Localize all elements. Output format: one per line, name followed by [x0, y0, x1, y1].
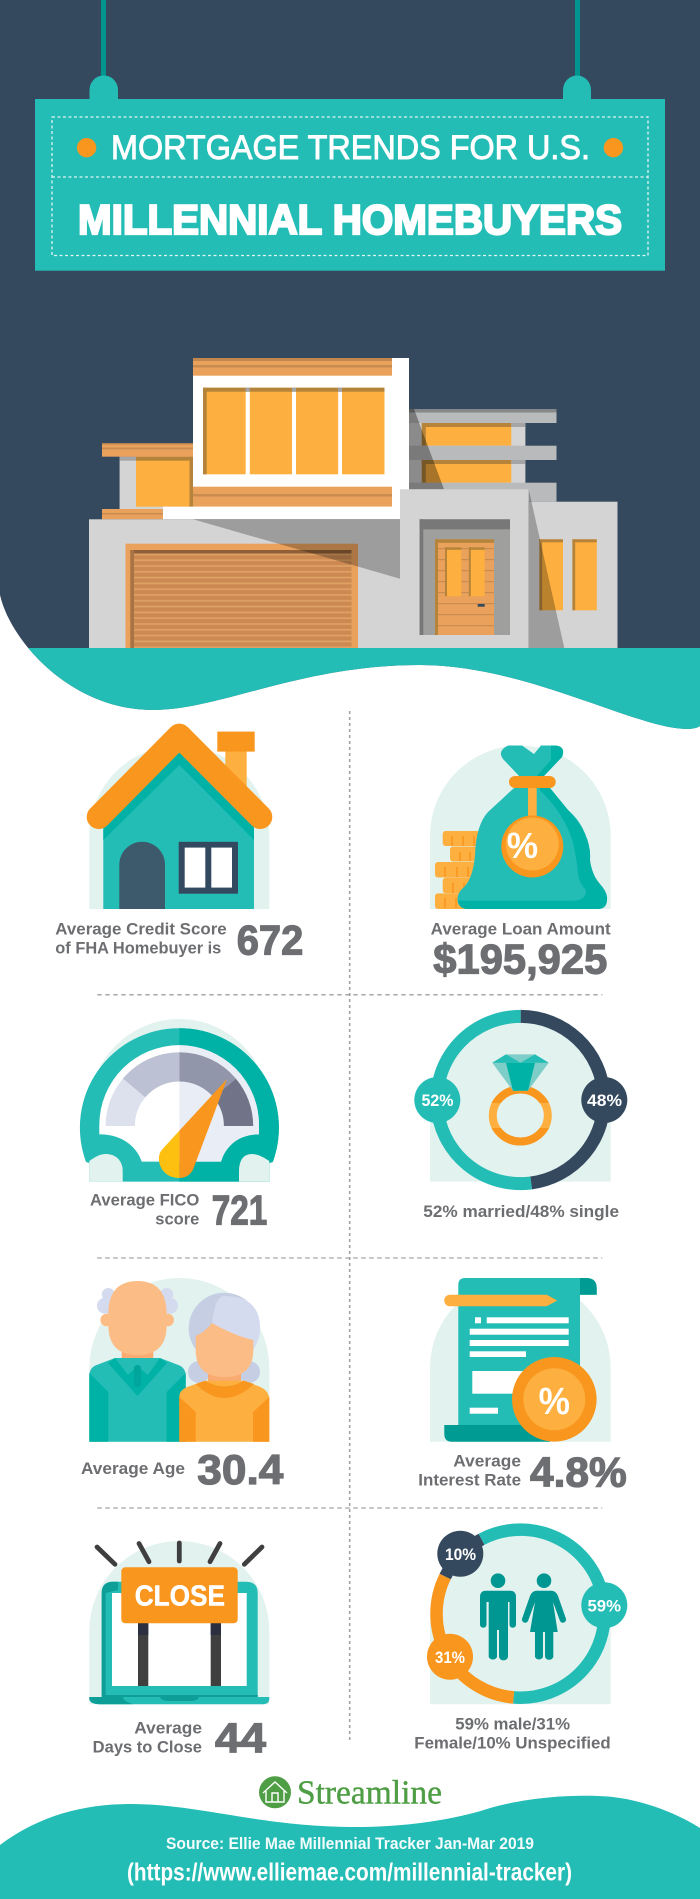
dashed grid dividers	[97, 711, 602, 1742]
dark header background	[0, 0, 700, 729]
panel: interest rate	[418, 1278, 627, 1496]
value: 30.4: 30.4	[197, 1446, 284, 1493]
label: married and single: 52% married/48% single	[423, 1203, 619, 1221]
value: $195,925: $195,925	[433, 935, 607, 982]
chart: married vs single donut	[414, 1016, 627, 1184]
icon: money bag and coins	[430, 746, 611, 909]
icon: house	[89, 732, 269, 909]
label: average: Average	[134, 1719, 202, 1737]
panel: average age	[81, 1278, 284, 1493]
chart: married vs single donut: 52%	[422, 1091, 454, 1110]
source url: (https://www.elliemae.com/millennial-tracker)	[127, 1859, 572, 1887]
value: 672: 672	[237, 916, 303, 964]
chart: gender donut: 59%	[588, 1596, 621, 1616]
label: female and unspecified: Female/10% Unspecified	[414, 1734, 611, 1752]
label: average loan amount: Average Loan Amount	[431, 920, 611, 938]
hanging sign with title	[35, 0, 665, 271]
label: score: score	[155, 1210, 199, 1228]
value: 721: 721	[212, 1186, 267, 1234]
chart: gender donut	[427, 1530, 627, 1704]
label: of FHA homebuyer: of FHA Homebuyer is	[55, 939, 221, 957]
modern house illustration	[89, 358, 618, 649]
title line 2: MILLENNIAL HOMEBUYERS	[78, 196, 622, 243]
label: male and female: 59% male/31%	[455, 1715, 570, 1733]
source line: Source: Ellie Mae Millennial Tracker Jan-Mar 2019	[166, 1834, 534, 1853]
icon: laptop with close sign	[89, 1541, 269, 1704]
panel: marital status	[414, 1016, 627, 1221]
logo: Streamline: Streamline	[297, 1774, 442, 1811]
label: credit score: Average Credit Score	[55, 920, 227, 938]
panel: loan amount	[430, 746, 611, 982]
panel: gender split	[414, 1530, 627, 1752]
label: days to close: Days to Close	[93, 1738, 202, 1756]
chart: gender donut: 31%	[435, 1648, 465, 1667]
panel: credit score	[55, 732, 303, 964]
panel: days to close	[89, 1541, 269, 1762]
chart: married vs single donut: 48%	[587, 1091, 622, 1110]
icon: laptop with close sign: CLOSE	[135, 1581, 225, 1613]
teal wave below house	[28, 648, 700, 729]
footer teal wave	[0, 1796, 700, 1899]
icon: document with percent badge: %	[539, 1381, 570, 1423]
icon: gauge	[80, 1019, 279, 1182]
value: 4.8%: 4.8%	[530, 1449, 627, 1496]
icon: man and woman	[480, 1573, 566, 1660]
value: 44: 44	[215, 1715, 267, 1762]
label: average age: Average Age	[81, 1460, 185, 1478]
chart: gender donut: 10%	[445, 1545, 476, 1564]
label: interest rate: Interest Rate	[418, 1472, 521, 1490]
icon: couple	[89, 1278, 269, 1442]
title line 1: MORTGAGE TRENDS FOR U.S.	[111, 129, 590, 167]
icon: money bag and coins: %	[507, 825, 538, 866]
panel: FICO score	[80, 1019, 279, 1234]
icon: document with percent badge	[430, 1278, 611, 1442]
icon: diamond ring	[492, 1054, 549, 1142]
label: average: Average	[453, 1453, 521, 1471]
label: average FICO: Average FICO	[90, 1191, 199, 1209]
